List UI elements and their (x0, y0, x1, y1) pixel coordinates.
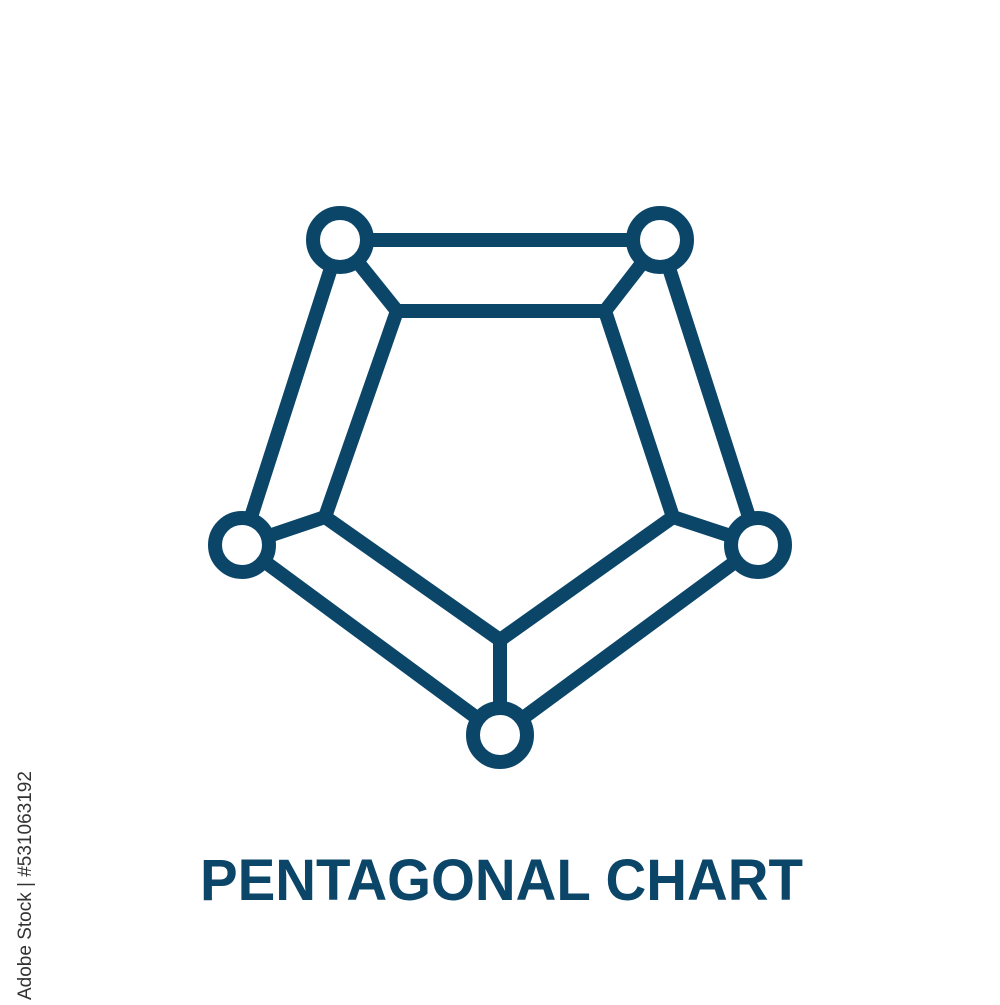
icon: pentagonal chart (215, 213, 785, 762)
vertex nodes (215, 213, 785, 762)
spokes (242, 240, 758, 735)
outer pentagon (242, 240, 758, 735)
inner pentagon (325, 311, 673, 640)
watermark id text: Adobe Stock | #531063192 (15, 771, 36, 1000)
title: PENTAGONAL CHART (200, 848, 803, 913)
